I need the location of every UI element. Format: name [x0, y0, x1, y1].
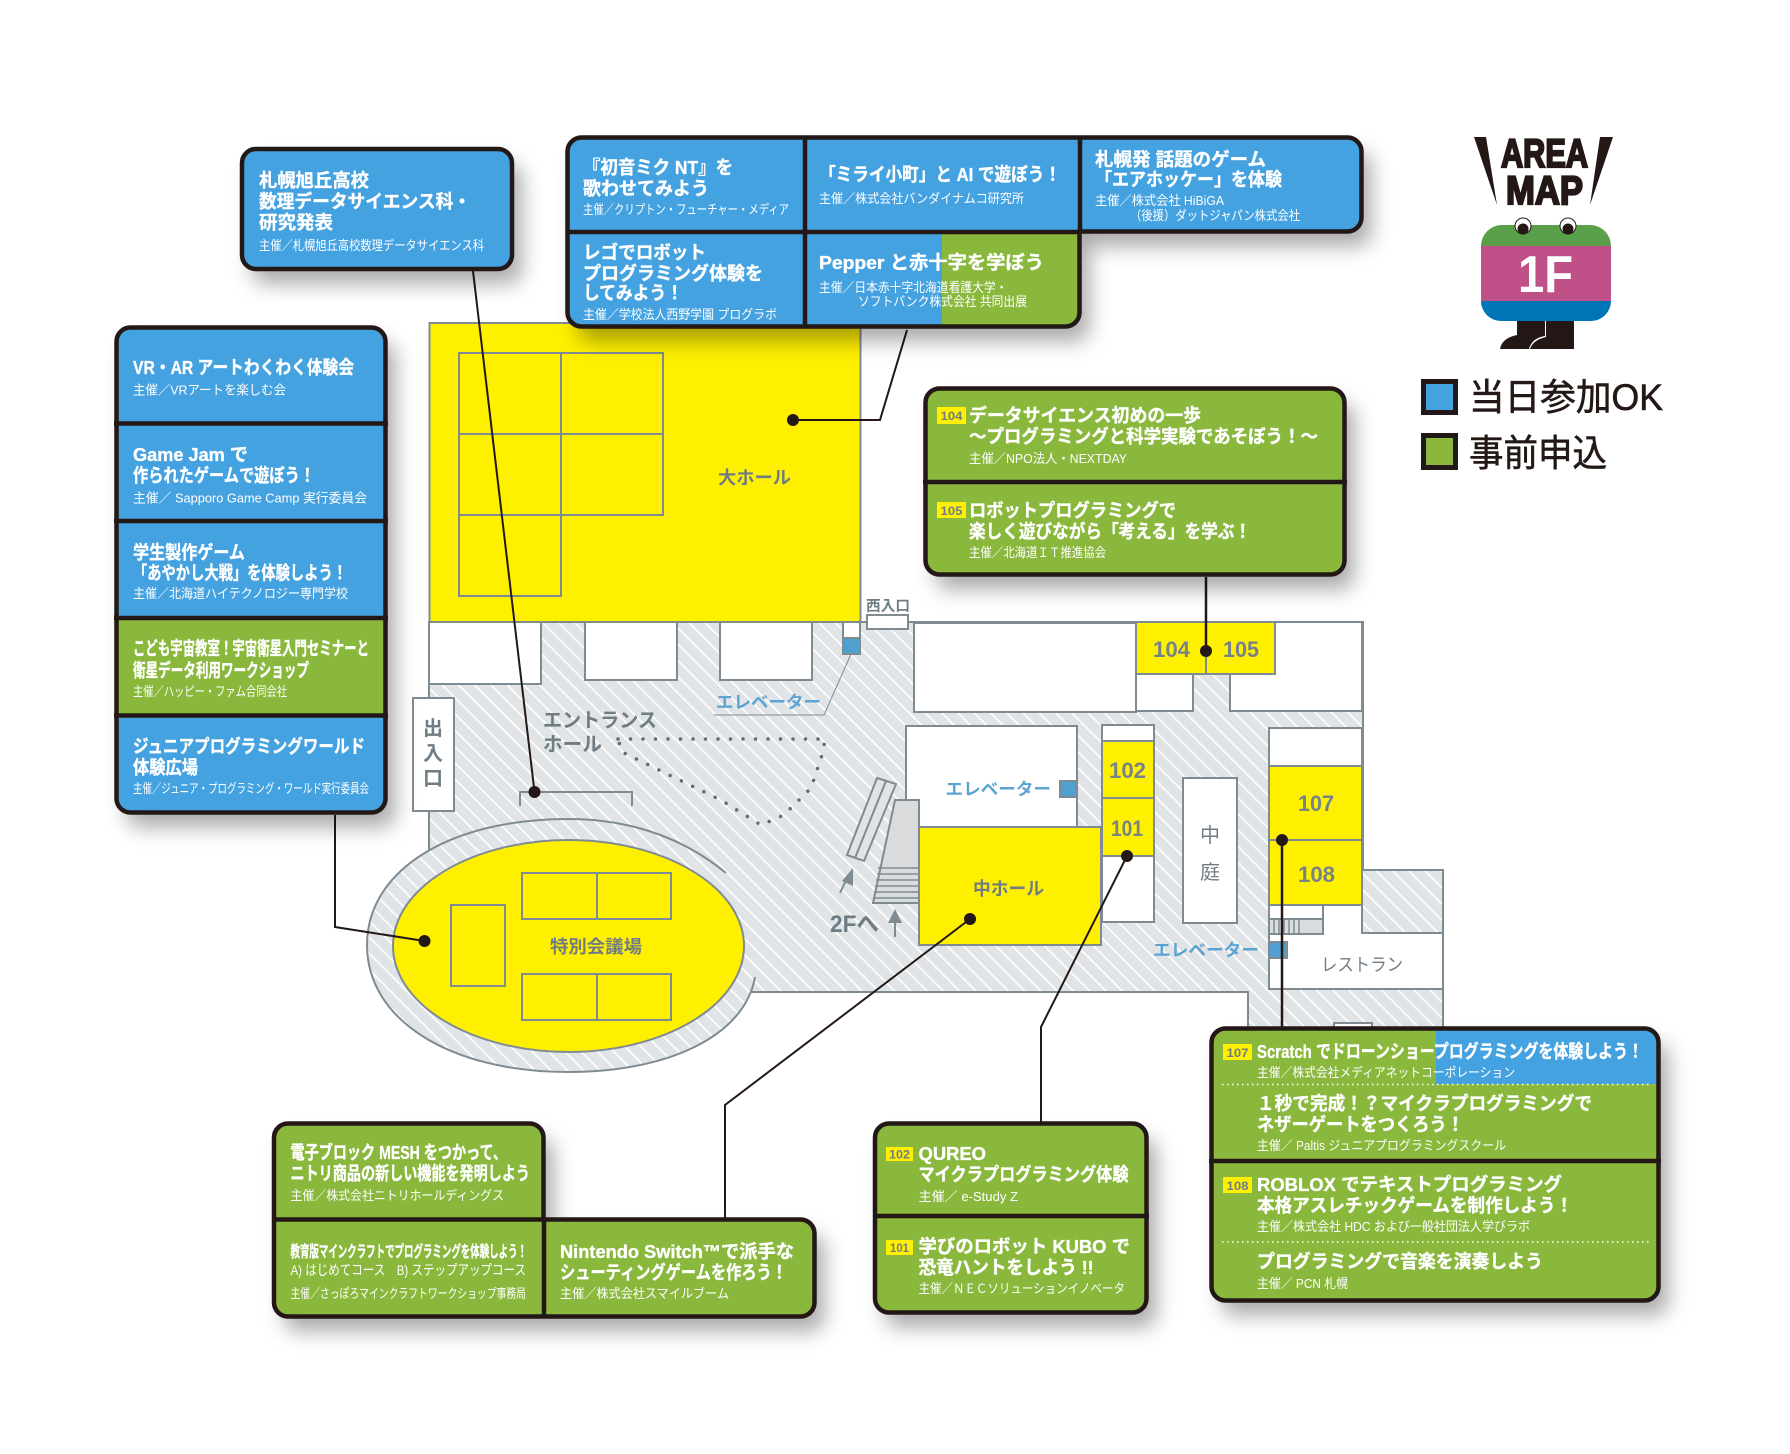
rooms 107 108	[1269, 728, 1362, 905]
panel: rooms 107 108: 主催／ PCN 札幌	[1257, 1276, 1348, 1291]
floor map	[367, 323, 1443, 1072]
legend: walk-in: 当日参加OK	[1469, 377, 1663, 418]
courtyard: 中	[1200, 824, 1220, 847]
elevator label west	[714, 654, 851, 715]
panel: left programmes	[114, 328, 388, 812]
panel: rooms 104 105: 主催／北海道ＩＴ推進協会	[969, 545, 1106, 560]
badge 105: 105	[940, 504, 963, 518]
panel: top programmes: Pepper と赤十字を学ぼう	[819, 252, 1044, 273]
panel: Sapporo Asahigaoka High School	[242, 149, 512, 269]
entrance hall label: エントランス	[543, 710, 657, 732]
panel: left programmes: 主催／ジュニア・プログラミング・ワールド実行委員会	[133, 781, 369, 796]
panel: left programmes: VR・AR アートわくわく体験会	[133, 357, 354, 378]
panel: lower left programmes: Nintendo Switch™で派手な	[560, 1241, 794, 1262]
panel: rooms 104 105: ～プログラミングと科学実験であそぼう！～	[969, 426, 1318, 447]
rooms 101 102: 102	[1109, 758, 1146, 783]
exit sign: 口	[423, 768, 443, 790]
panel: Sapporo Asahigaoka High School: 数理データサイエンス科・	[259, 191, 471, 212]
panel: left programmes: 主催／ハッピー・ファム合同会社	[133, 684, 287, 699]
panel: Sapporo Asahigaoka High School: 研究発表	[259, 212, 333, 233]
panel: top programmes: 主催／株式会社 HiBiGA	[1095, 193, 1224, 208]
panel: rooms 104 105: 楽しく遊びながら「考える」を学ぶ！	[969, 521, 1251, 542]
panel: left programmes: Game Jam で	[133, 444, 248, 465]
panel: top programmes: 「エアホッケー」を体験	[1095, 169, 1282, 190]
panel: rooms 104 105: ロボットプログラミングで	[969, 500, 1176, 521]
panel: lower left programmes: 教育版マインクラフトでプログラミングを体験しよう！	[290, 1242, 527, 1261]
panel: left programmes: 体験広場	[133, 757, 198, 778]
panel: top programmes: 「ミライ小町」と AI で遊ぼう！	[819, 164, 1061, 185]
panel: Sapporo Asahigaoka High School: 主催／札幌旭丘高校数理データサイエンス科	[259, 238, 484, 253]
legend	[1424, 377, 1663, 474]
rooms 107 108: 107	[1298, 791, 1334, 816]
panel: top programmes	[567, 137, 1362, 327]
panel: lower left programmes: 電子ブロック MESH をつかって、	[290, 1142, 507, 1163]
badge 108: 108	[1226, 1179, 1249, 1193]
panel: top programmes: 札幌発 話題のゲーム	[1095, 149, 1266, 170]
large hall: 大ホール	[718, 468, 791, 488]
badge 101	[886, 1240, 913, 1255]
panel: left programmes: 主催／北海道ハイテクノロジー専門学校	[133, 586, 348, 601]
panel: rooms 104 105: データサイエンス初めの一歩	[969, 405, 1201, 426]
panel: rooms 101 102: マイクラプログラミング体験	[918, 1164, 1129, 1185]
panel: top programmes: ソフトバンク株式会社 共同出展	[858, 294, 1027, 309]
middle hall: 中ホール	[973, 879, 1044, 899]
badge 108	[1223, 1177, 1252, 1193]
panel: lower left programmes: 主催／さっぽろマインクラフトワークショップ事務局	[290, 1286, 526, 1301]
panel: rooms 107 108: 本格アスレチックゲームを制作しよう！	[1257, 1195, 1573, 1216]
panel: top programmes: してみよう！	[583, 282, 683, 304]
to 2F label: 2Fへ	[830, 911, 879, 938]
badge 104: 104	[940, 409, 963, 423]
panel: rooms 107 108	[1209, 1028, 1661, 1300]
panel: Sapporo Asahigaoka High School: 札幌旭丘高校	[259, 170, 369, 191]
elevator room centre: エレベーター	[946, 780, 1051, 799]
elevator label west: エレベーター	[716, 693, 821, 712]
icon: 1F mascot: 1F	[1518, 246, 1573, 304]
panel: top programmes: レゴでロボット	[583, 242, 706, 263]
rooms 101 102	[1102, 725, 1154, 922]
badge 107	[1223, 1044, 1252, 1060]
panel: rooms 107 108: ネザーゲートをつくろう！	[1257, 1114, 1464, 1135]
title: AREA MAP	[1474, 132, 1613, 213]
restaurant	[1269, 905, 1443, 989]
panel: rooms 107 108: 主催／株式会社 HDC および一般社団法人学びラボ	[1257, 1219, 1530, 1234]
entrance hall label: ホール	[543, 734, 602, 756]
badge 101: 101	[890, 1241, 909, 1255]
arrow to second floor left	[840, 868, 853, 893]
courtyard	[1183, 778, 1237, 923]
entrance bracket	[520, 792, 632, 806]
panel: top programmes: 主催／学校法人西野学園 プログラボ	[583, 307, 777, 322]
panel: rooms 104 105	[923, 388, 1347, 574]
panel: lower left programmes: ニトリ商品の新しい機能を発明しよう	[290, 1163, 530, 1184]
escalator	[847, 778, 896, 861]
badge 104	[937, 407, 966, 424]
panel: rooms 101 102: 主催／ e-Study Z	[918, 1189, 1018, 1204]
title: AREA MAP: MAP	[1506, 169, 1583, 213]
middle hall	[919, 827, 1101, 945]
large hall	[430, 323, 860, 622]
elevator room centre	[906, 726, 1077, 828]
special conference hall	[393, 840, 744, 1052]
title: AREA MAP: AREA	[1501, 132, 1588, 176]
panel: left programmes: 主催／ Sapporo Game Camp 実行委員会	[133, 490, 367, 506]
panel: left programmes: ジュニアプログラミングワールド	[133, 736, 365, 757]
panel: rooms 107 108: ROBLOX でテキストプログラミング	[1257, 1174, 1562, 1195]
panel: rooms 101 102: 恐竜ハントをしよう !!	[918, 1257, 1094, 1278]
rooms 104 105	[1136, 622, 1275, 674]
panel: rooms 101 102: 学びのロボット KUBO で	[918, 1236, 1130, 1257]
arrow to second floor right	[888, 909, 902, 937]
dotted entrance zone	[618, 739, 825, 825]
exit sign: 出	[423, 717, 443, 740]
special conference hall: 特別会議場	[550, 937, 642, 957]
panel: top programmes: 主催／クリプトン・フューチャー・メディア	[583, 202, 789, 217]
panel: top programmes: 歌わせてみよう	[583, 178, 709, 199]
restaurant: レストラン	[1321, 955, 1403, 975]
panel: rooms 101 102	[873, 1124, 1149, 1312]
elevator label east: エレベーター	[1153, 941, 1259, 960]
upper right rooms	[914, 622, 1362, 712]
panel: top programmes: 『初音ミク NT』を	[583, 157, 733, 178]
panel: lower left programmes: シューティングゲームを作ろう！	[560, 1262, 787, 1283]
panel: rooms 107 108: プログラミングで音楽を演奏しよう	[1257, 1251, 1543, 1272]
special hall outer ring outline	[367, 819, 755, 1072]
leader lines	[335, 271, 1288, 1220]
rooms 107 108: 108	[1298, 862, 1335, 887]
special hall outer ring	[367, 819, 755, 1072]
panel: top programmes: プログラミング体験を	[583, 263, 763, 284]
courtyard: 庭	[1200, 861, 1220, 884]
panel: lower left programmes	[272, 1124, 814, 1318]
panel: rooms 107 108: １秒で完成！？マイクラプログラミングで	[1257, 1093, 1592, 1114]
panel: rooms 107 108: 主催／ Paltis ジュニアプログラミングスクール	[1257, 1138, 1506, 1153]
exit sign: 入	[423, 743, 443, 765]
west entrance	[866, 599, 910, 629]
west entrance: 西入口	[866, 599, 910, 615]
panel: lower left programmes: 主催／株式会社ニトリホールディングス	[290, 1188, 504, 1203]
panel: left programmes: 作られたゲームで遊ぼう！	[133, 465, 315, 486]
panel: top programmes: 主催／株式会社バンダイナムコ研究所	[819, 191, 1024, 206]
lower right small door	[1334, 1023, 1372, 1031]
legend: pre-registration: 事前申込	[1469, 433, 1607, 474]
rooms below large hall	[429, 622, 860, 684]
rooms 104 105: 105	[1223, 637, 1259, 662]
stairs	[873, 800, 919, 903]
exit sign	[413, 698, 454, 811]
badge 107: 107	[1226, 1046, 1249, 1060]
panel: top programmes: （後援）ダットジャパン株式会社	[1130, 208, 1300, 223]
panel: left programmes: 学生製作ゲーム	[133, 542, 245, 563]
panel: rooms 107 108: 主催／株式会社メディアネットコーポレーション	[1257, 1065, 1515, 1080]
panel: rooms 101 102: QUREO	[918, 1143, 986, 1164]
panel: left programmes: 「あやかし大戦」を体験しよう！	[133, 562, 347, 584]
rooms 104 105: 104	[1153, 637, 1191, 662]
panel: rooms 107 108: Scratch でドローンショープログラミングを体験しよう！	[1257, 1041, 1643, 1062]
panel: lower left programmes: 主催／株式会社スマイルブーム	[560, 1286, 729, 1301]
badge 105	[937, 502, 966, 518]
panel: top programmes: 主催／日本赤十字北海道看護大学・	[819, 280, 1008, 295]
corridor floor	[429, 622, 1443, 1030]
panel: left programmes: こども宇宙教室！宇宙衛星入門セミナーと	[133, 638, 369, 659]
badge 102: 102	[889, 1148, 910, 1162]
panel: lower left programmes: A) はじめてコース B) ステップアップコース	[290, 1262, 526, 1278]
panel: rooms 104 105: 主催／NPO法人・NEXTDAY	[969, 451, 1127, 466]
panel: left programmes: 衛星データ利用ワークショップ	[133, 660, 309, 681]
rooms 101 102: 101	[1111, 816, 1143, 841]
entrance hall label	[543, 710, 657, 756]
icon: 1F mascot	[1481, 218, 1611, 349]
panel: left programmes: 主催／VRアートを楽しむ会	[133, 382, 286, 398]
panel: rooms 101 102: 主催／ＮＥＣソリューションイノベータ	[918, 1281, 1125, 1296]
